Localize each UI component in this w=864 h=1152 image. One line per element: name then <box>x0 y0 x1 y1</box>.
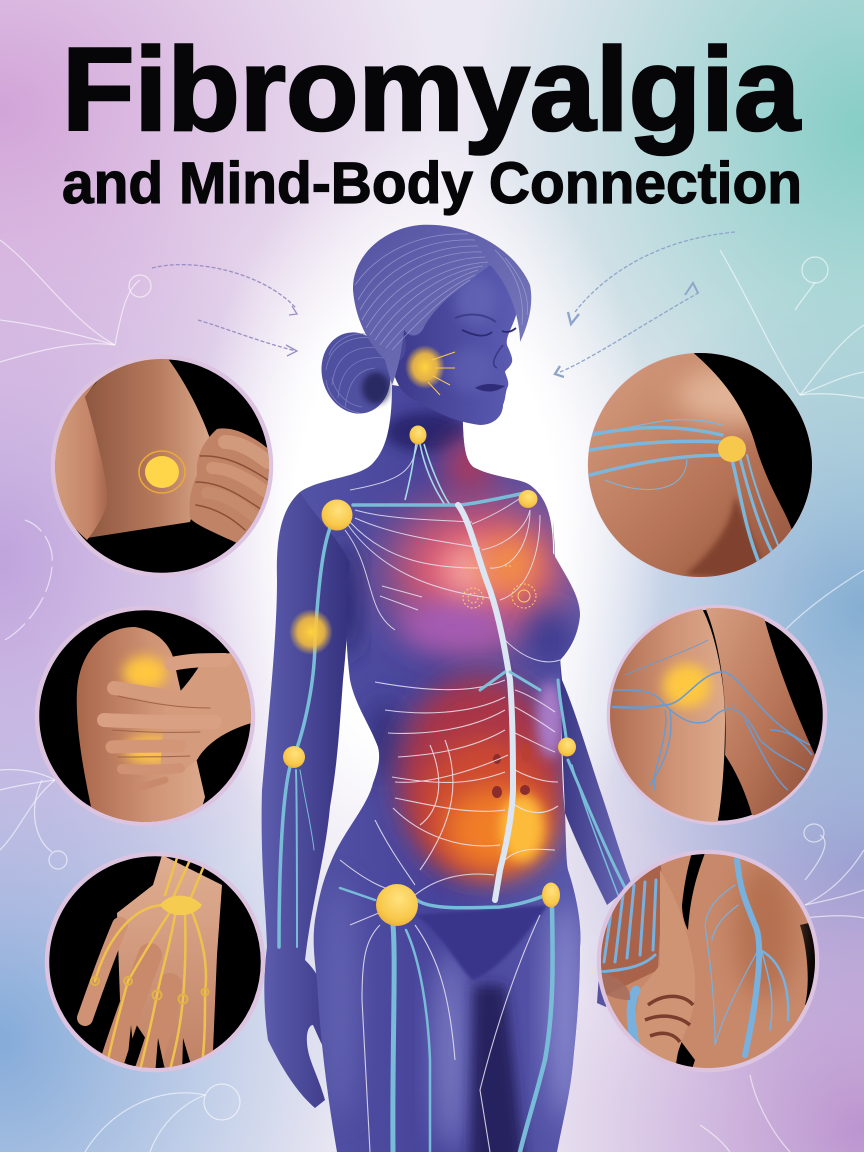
torso side <box>55 380 108 540</box>
pain point: right hip <box>542 882 560 908</box>
panel: hand and leg nerves <box>596 850 822 1075</box>
figure <box>262 225 632 1152</box>
heading: Fibromyalgia: Fibromyalgia <box>62 24 801 156</box>
nerve node <box>718 436 746 462</box>
forearm <box>85 352 213 538</box>
hand folds <box>632 870 695 1063</box>
hand <box>117 855 222 1075</box>
pain point: left shoulder <box>322 500 352 530</box>
leg shading <box>735 860 795 1000</box>
pain point: right shoulder <box>518 490 538 508</box>
far arm and hand <box>553 520 632 1007</box>
dashed arrows: upper right <box>555 232 735 377</box>
panel: hand nerves <box>47 854 263 1085</box>
chest sparks <box>463 566 536 608</box>
fingers <box>104 660 225 788</box>
chest nerve lines <box>345 442 560 662</box>
front leg <box>610 609 725 822</box>
sternum nerve <box>458 505 540 900</box>
arm shading <box>585 350 815 580</box>
main nerve pathways <box>279 493 628 1152</box>
abdomen glow <box>398 675 562 875</box>
arm pain glow <box>289 609 333 655</box>
pain point: left hip <box>376 884 418 926</box>
gaps between fingers <box>127 1025 190 1068</box>
nerves <box>612 640 812 790</box>
face and neck <box>388 262 518 425</box>
palm <box>160 653 251 766</box>
subheading: and Mind-Body Connection: and Mind-Body Connection <box>62 151 802 216</box>
hair <box>353 225 531 385</box>
fist <box>189 428 275 543</box>
glowing point <box>145 456 179 488</box>
pain point: right forearm <box>558 738 576 756</box>
decorative nerve flourishes <box>0 240 864 1152</box>
panel: arm and hand <box>37 608 255 825</box>
arm <box>77 627 205 825</box>
cheek pain point <box>405 345 455 395</box>
black gaps <box>682 853 705 930</box>
pain glow <box>663 664 711 708</box>
abdomen rib lines <box>340 680 558 1152</box>
panel: shoulder nerves <box>588 352 812 578</box>
navel marks <box>492 744 531 798</box>
yellow nerves <box>95 858 206 1070</box>
knuckle folds <box>196 442 268 530</box>
torso and legs <box>290 380 590 1152</box>
neck nerves <box>405 444 450 505</box>
panel: thigh nerves <box>600 605 825 825</box>
nerve bundle <box>600 860 788 1070</box>
nerve bundle <box>590 419 778 565</box>
chest glow <box>390 500 566 640</box>
pain point: left forearm <box>283 746 305 768</box>
near arm and hand <box>262 492 360 1108</box>
title <box>62 24 802 216</box>
pain point: neck <box>410 426 426 444</box>
rear leg <box>704 605 815 820</box>
black background <box>694 353 812 530</box>
hair bun <box>313 325 399 421</box>
dashed arrows: upper left <box>152 265 297 356</box>
panel: shoulder trigger point <box>45 350 275 575</box>
